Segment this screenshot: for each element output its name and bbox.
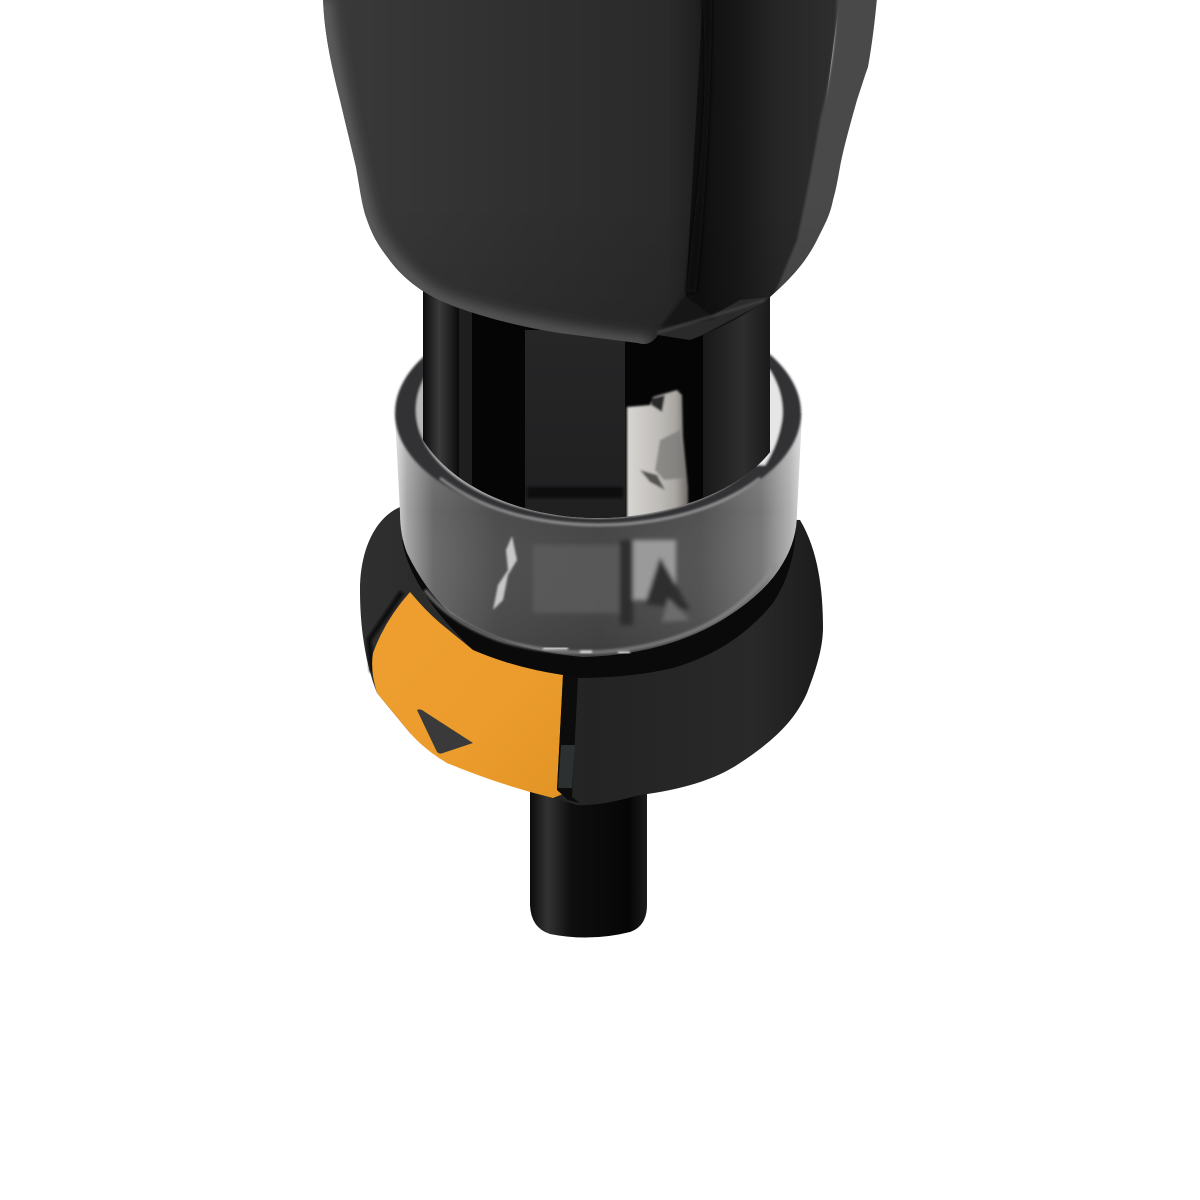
rim speckle highlights xyxy=(543,648,630,653)
orange release button xyxy=(372,592,563,798)
black gap under sleeve xyxy=(402,525,796,678)
grip right strip xyxy=(774,0,877,294)
lobe fold xyxy=(662,298,769,340)
grip right of groove xyxy=(680,0,840,345)
sleeve wall xyxy=(395,413,802,657)
lower glass rim xyxy=(425,565,775,652)
centre post xyxy=(525,330,625,525)
handle grip xyxy=(323,0,877,344)
reflected inner panel xyxy=(533,545,619,613)
grip groove xyxy=(686,0,712,293)
metal bit xyxy=(627,390,688,520)
grip lower shading xyxy=(492,318,647,344)
refraction highlight xyxy=(493,536,517,610)
inner cage xyxy=(423,285,770,525)
output shaft xyxy=(530,780,647,938)
centre post shadow band xyxy=(527,487,623,498)
button arrow icon xyxy=(417,709,473,754)
grip rim light xyxy=(323,0,650,345)
left post xyxy=(423,292,459,478)
rim front highlight xyxy=(440,478,760,525)
reflected dark stripe xyxy=(620,540,633,625)
clear cartridge sleeve xyxy=(395,302,802,657)
base collar xyxy=(360,507,823,805)
sleeve top opening xyxy=(395,302,801,523)
button side gap xyxy=(557,675,580,803)
reflected bit xyxy=(633,540,676,600)
right post xyxy=(703,297,770,498)
reflected interior xyxy=(533,540,690,625)
collar left piece divider xyxy=(369,592,402,672)
product illustration: screwdriver xyxy=(323,0,877,938)
